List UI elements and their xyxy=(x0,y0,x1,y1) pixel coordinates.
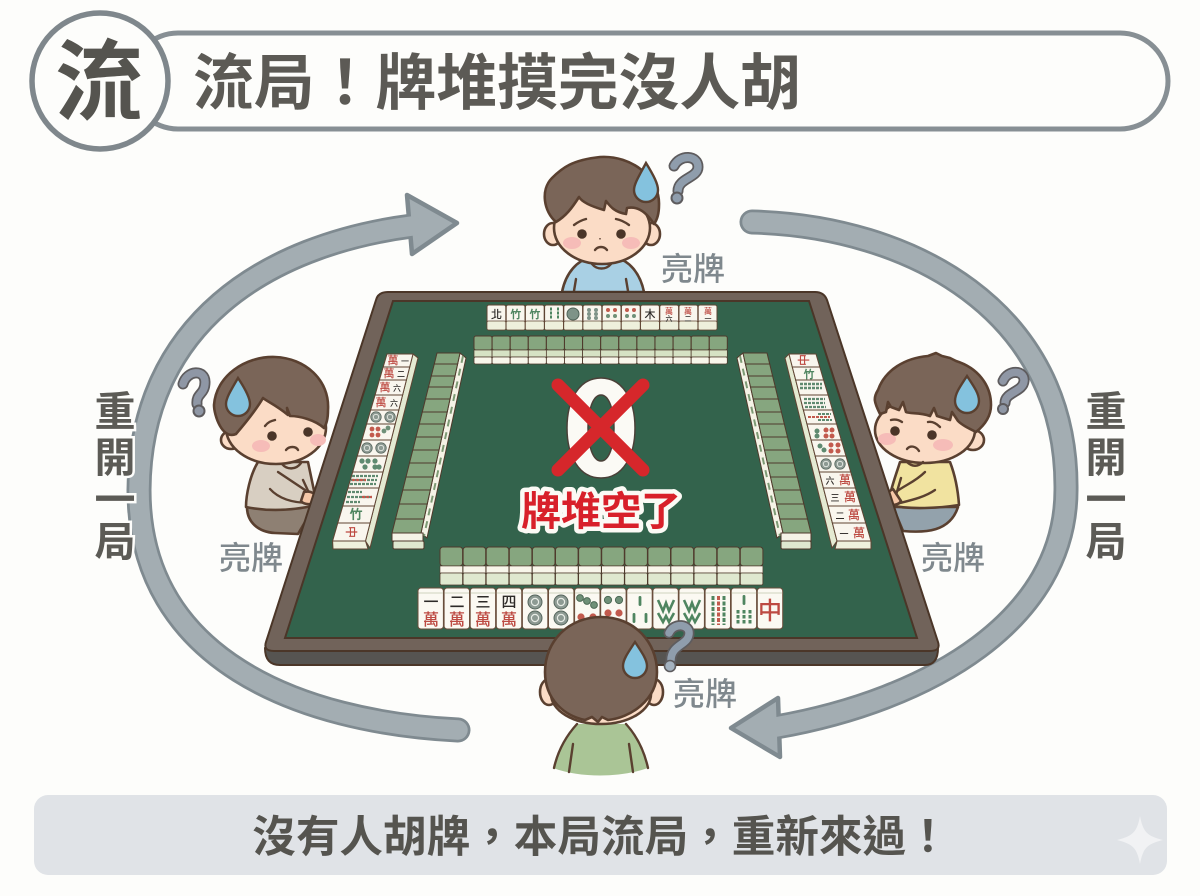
icon: question mark xyxy=(998,372,1024,414)
table frame xyxy=(265,292,939,651)
top player exposed tiles: 二 xyxy=(684,314,692,324)
title badge: 流 xyxy=(55,12,143,139)
empty wall callout: 牌堆空了 xyxy=(521,479,681,537)
left player exposed tiles: 萬 xyxy=(376,394,386,410)
top player exposed tiles: 北 xyxy=(491,306,502,322)
bottom player exposed tiles: 中 xyxy=(758,591,782,626)
title badge xyxy=(32,12,168,149)
label: bottom show tiles: 亮牌 xyxy=(673,669,737,715)
left tile wall xyxy=(392,353,466,549)
left player exposed tiles: 六 xyxy=(393,383,401,394)
bottom player exposed tiles: 四 xyxy=(501,591,517,612)
right player exposed tiles: 一 xyxy=(839,527,849,540)
loop arrow: right, restart xyxy=(731,222,1066,757)
character: top player xyxy=(544,157,698,292)
top player exposed tiles: 一 xyxy=(704,314,712,324)
right player exposed tiles: 萬 xyxy=(848,506,860,523)
left player exposed tiles: 萬 xyxy=(388,352,398,368)
label: left show tiles: 亮牌 xyxy=(219,533,283,579)
character: bottom player, from behind xyxy=(540,617,689,776)
red cross xyxy=(558,385,643,470)
bottom tile wall xyxy=(440,547,763,585)
label: restart right: 開 xyxy=(1086,424,1126,484)
right player exposed tiles: 萬 xyxy=(853,524,865,541)
bottom player exposed tiles: 萬 xyxy=(475,606,491,630)
label: restart left: 重 xyxy=(94,378,136,438)
label: top show tiles: 亮牌 xyxy=(661,244,725,290)
top player exposed tiles: 六 xyxy=(666,314,672,324)
top player exposed tiles: 萬 xyxy=(704,306,712,317)
loop arrow: left, restart xyxy=(139,195,458,730)
bottom player exposed tiles: 萬 xyxy=(423,606,439,630)
label: restart right: 局 xyxy=(1086,508,1126,568)
zero tiles symbol xyxy=(558,378,643,478)
bottom player exposed tiles: 二 xyxy=(449,591,465,612)
bottom player exposed tiles: 三 xyxy=(475,591,491,612)
left player exposed tiles: 二 xyxy=(397,369,405,380)
title bar xyxy=(32,12,1168,149)
label: restart right xyxy=(1086,378,1126,568)
left player exposed tiles: 中 xyxy=(343,526,360,538)
top player exposed tiles: 竹 xyxy=(529,306,540,322)
icon: question mark xyxy=(672,157,698,204)
right player exposed tiles: 三 xyxy=(830,491,840,504)
label: restart right: 一 xyxy=(1086,466,1126,526)
bottom player exposed tiles: 萬 xyxy=(449,606,465,630)
icon: sparkle xyxy=(1117,816,1163,864)
character: left player xyxy=(183,357,328,534)
right player exposed tiles: 竹 xyxy=(804,366,814,382)
icon: question mark xyxy=(183,373,205,416)
label: restart left: 局 xyxy=(94,508,136,568)
top player exposed tiles: 竹 xyxy=(510,306,521,322)
left player exposed tiles xyxy=(333,352,418,549)
left player exposed tiles: 萬 xyxy=(384,365,394,381)
label: restart left xyxy=(94,378,136,568)
title pill xyxy=(130,33,1168,129)
right player exposed tiles: 萬 xyxy=(839,471,851,488)
table felt xyxy=(285,301,917,638)
label: right show tiles: 亮牌 xyxy=(921,533,985,579)
mahjong table xyxy=(265,292,939,665)
left player exposed tiles: 萬 xyxy=(380,379,390,395)
right player exposed tiles: 六 xyxy=(825,474,835,487)
top tile wall xyxy=(474,336,727,364)
left player exposed tiles: 一 xyxy=(401,356,409,367)
icon: sweat drop xyxy=(623,642,647,678)
icon: sweat drop xyxy=(634,163,658,202)
right tile wall xyxy=(737,353,811,549)
top player exposed tiles: 木 xyxy=(644,306,656,322)
conclusion banner: 沒有人胡牌，本局流局，重新來過！ xyxy=(252,801,950,865)
label: restart right: 重 xyxy=(1086,378,1126,438)
right player exposed tiles xyxy=(785,354,871,549)
left player exposed tiles: 竹 xyxy=(349,504,363,523)
bottom player exposed tiles xyxy=(418,588,783,630)
title text: 流局！牌堆摸完沒人胡 xyxy=(193,33,801,122)
conclusion banner xyxy=(34,795,1167,875)
right player exposed tiles: 中 xyxy=(795,354,812,366)
label: restart left: 開 xyxy=(94,424,136,484)
bottom player exposed tiles: 萬 xyxy=(501,606,517,630)
left player exposed tiles: 六 xyxy=(390,398,398,409)
icon: sweat drop xyxy=(955,376,979,413)
right player exposed tiles: 二 xyxy=(835,509,845,522)
right player exposed tiles: 萬 xyxy=(844,488,856,505)
character: right player xyxy=(875,353,1024,532)
icon: question mark xyxy=(664,626,689,672)
icon: sweat drop xyxy=(226,378,250,416)
top player exposed tiles: 萬 xyxy=(665,306,673,317)
top player exposed tiles: 萬 xyxy=(684,306,692,317)
table side xyxy=(265,640,938,665)
label: restart left: 一 xyxy=(94,466,136,526)
top player exposed tiles xyxy=(487,305,717,330)
bottom player exposed tiles: 一 xyxy=(423,591,439,612)
